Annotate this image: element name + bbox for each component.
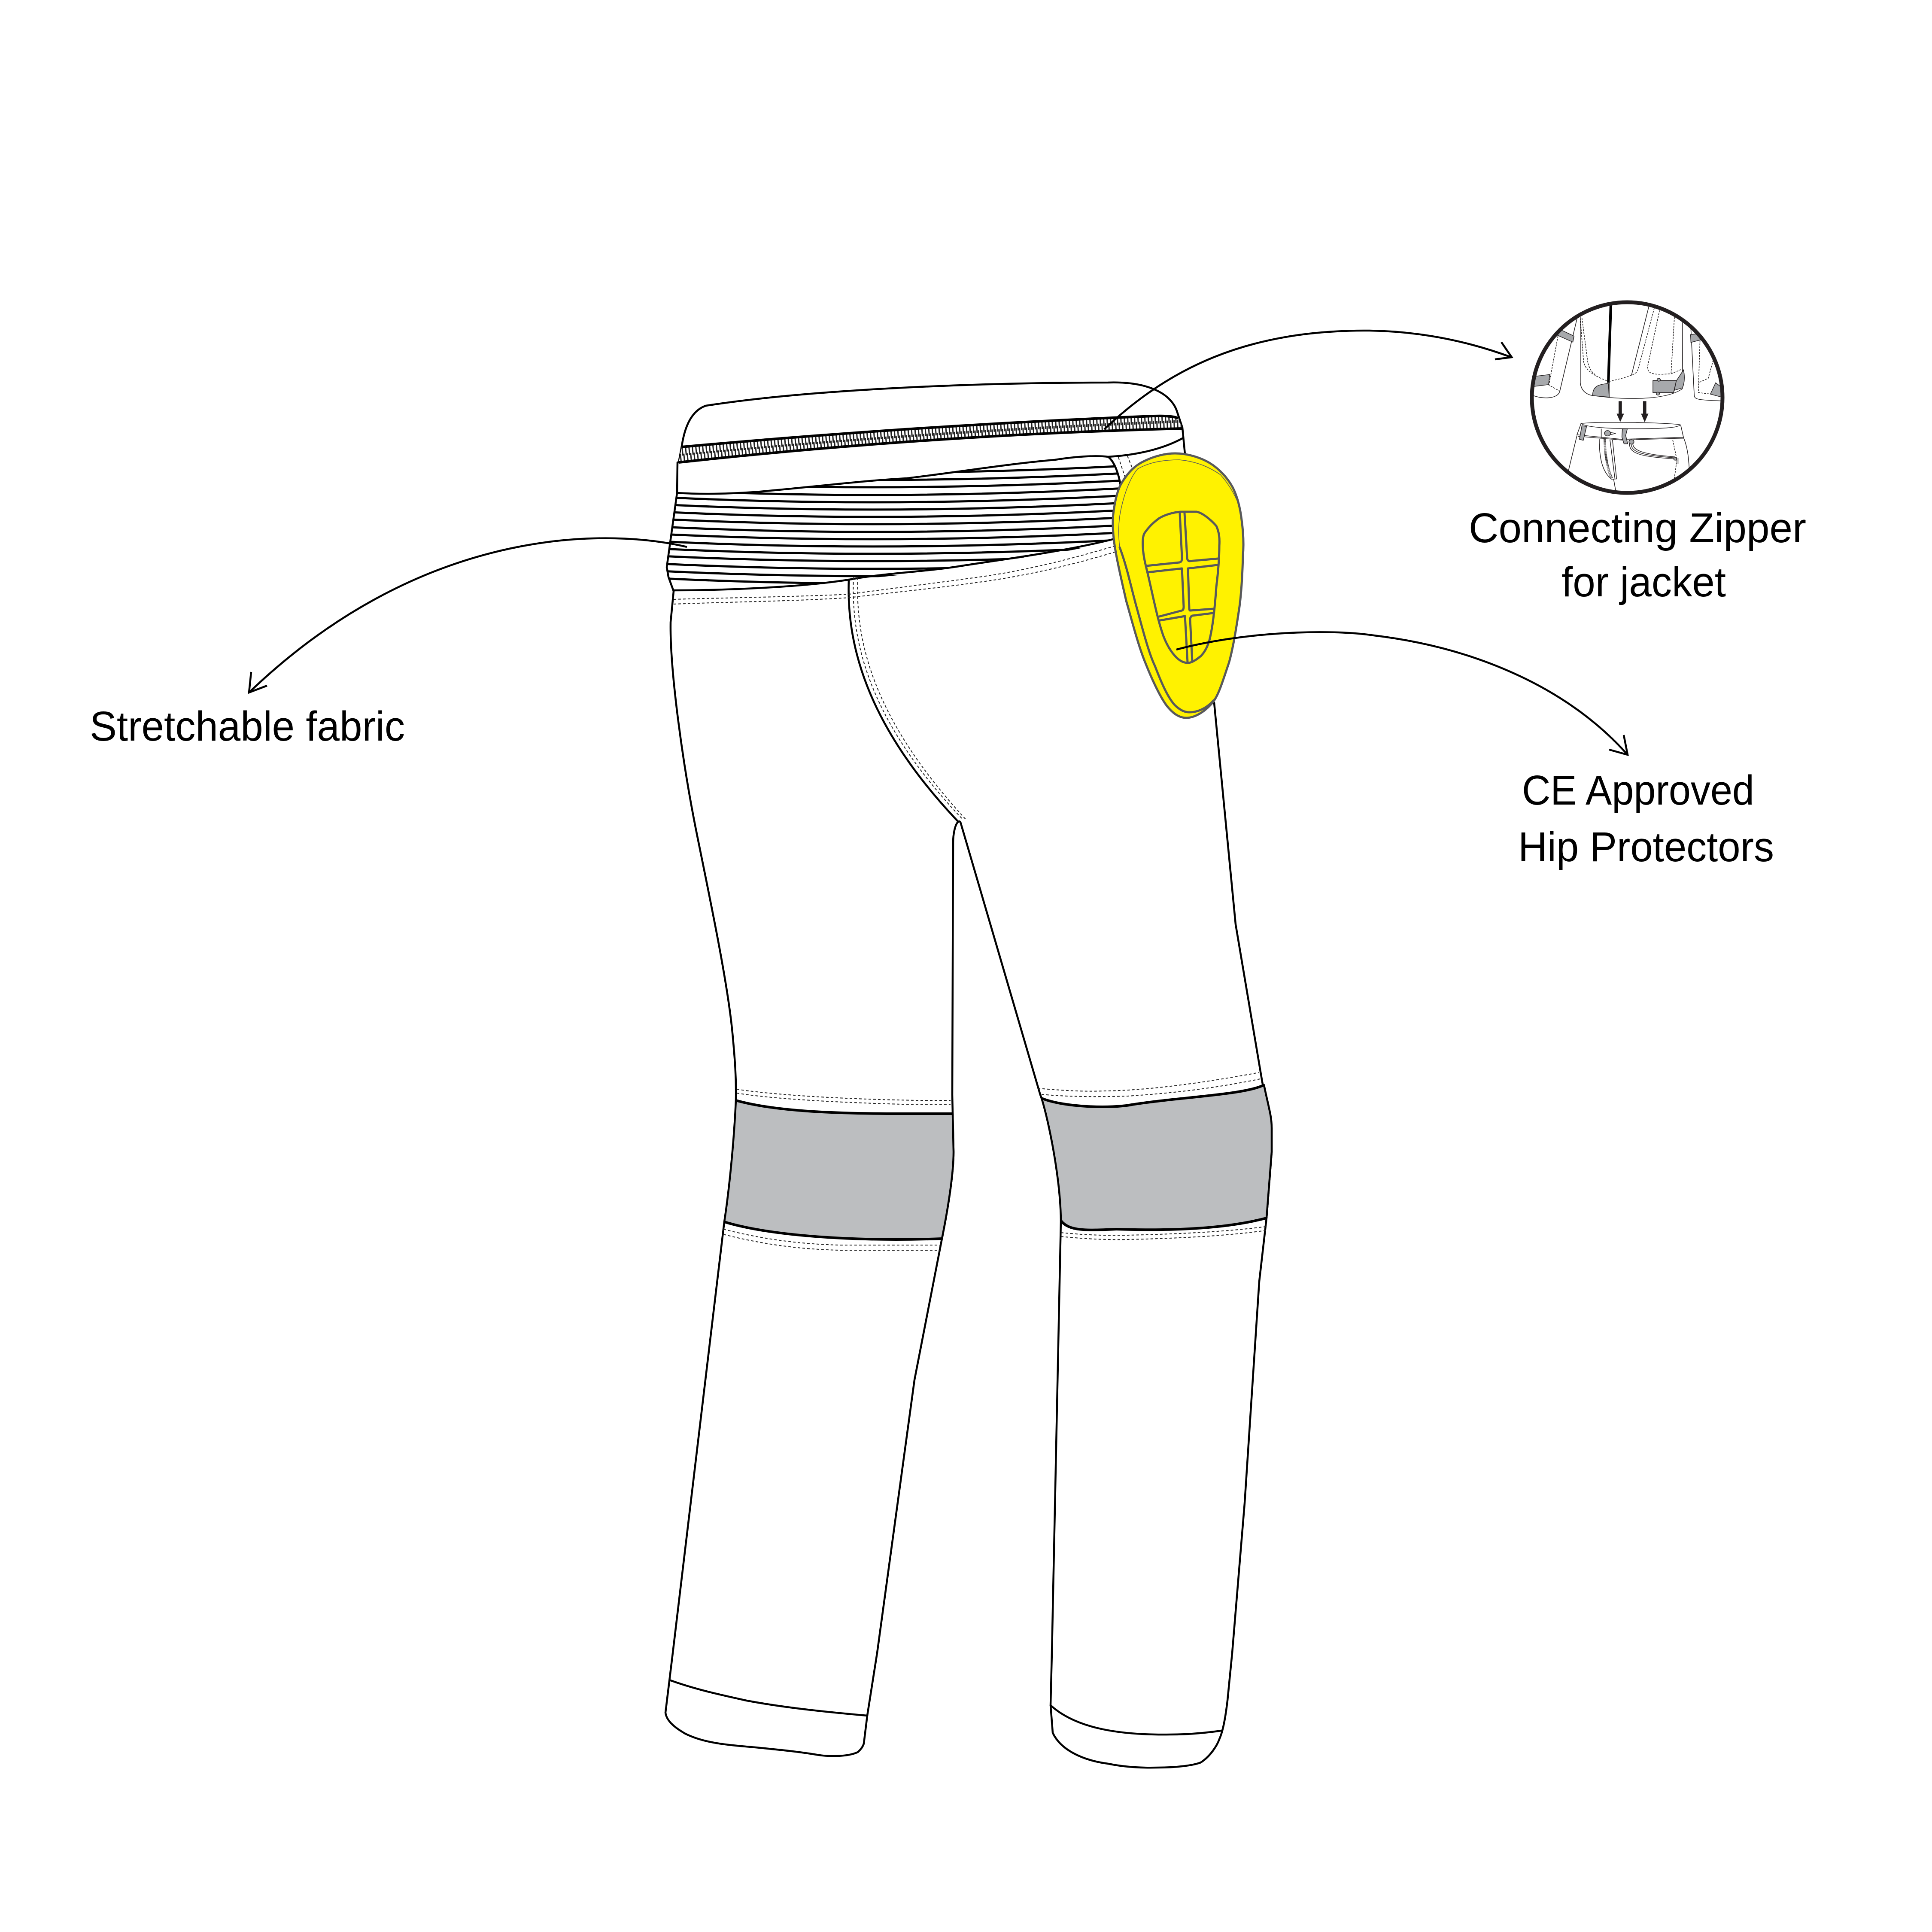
inseam left xyxy=(864,822,958,1744)
pad rim xyxy=(1120,547,1214,712)
inset trousers top xyxy=(1568,422,1689,491)
label: hip protectors: Hip Protectors xyxy=(1518,823,1774,870)
right cuff xyxy=(1051,1705,1221,1735)
inset: jacket zipper detail xyxy=(1532,302,1722,493)
left knee panel xyxy=(724,1100,954,1239)
fly seam xyxy=(849,580,958,822)
right knee panel xyxy=(1042,1085,1272,1230)
left cuff xyxy=(671,1680,867,1716)
left leg upper xyxy=(671,591,736,1100)
waistband outline xyxy=(677,383,1185,493)
inset jacket hem xyxy=(1580,305,1684,398)
arrow: hip protectors xyxy=(1176,632,1628,755)
inset right sleeve xyxy=(1691,329,1722,401)
arrow: stretchable fabric xyxy=(249,538,687,693)
trousers illustration xyxy=(661,383,1272,1768)
inner right thigh xyxy=(958,821,1042,1098)
right leg lower xyxy=(1051,1221,1219,1768)
left leg lower xyxy=(665,1222,864,1756)
label: connecting zipper: Connecting Zipper xyxy=(1469,504,1806,551)
inset left sleeve xyxy=(1533,319,1577,398)
label: connecting zipper: for jacket xyxy=(1561,559,1726,605)
connecting zipper band xyxy=(678,416,1185,462)
stitching xyxy=(674,456,1266,1250)
right leg outer xyxy=(1214,703,1272,1739)
pad body xyxy=(1113,453,1243,718)
inset circle frame xyxy=(1532,302,1722,493)
stretchable fabric panel xyxy=(661,456,1133,591)
label: hip protectors: CE Approved xyxy=(1522,767,1754,814)
yoke line xyxy=(1108,438,1182,457)
label: connecting zipper xyxy=(1469,504,1806,605)
label: hip protectors xyxy=(1518,767,1774,870)
hip protector xyxy=(1113,453,1243,718)
inset arrows xyxy=(1616,401,1649,422)
shield cut-out with grid xyxy=(1143,512,1219,663)
label: stretchable fabric: Stretchable fabric xyxy=(90,703,405,750)
arrow: connecting zipper xyxy=(1104,331,1512,429)
